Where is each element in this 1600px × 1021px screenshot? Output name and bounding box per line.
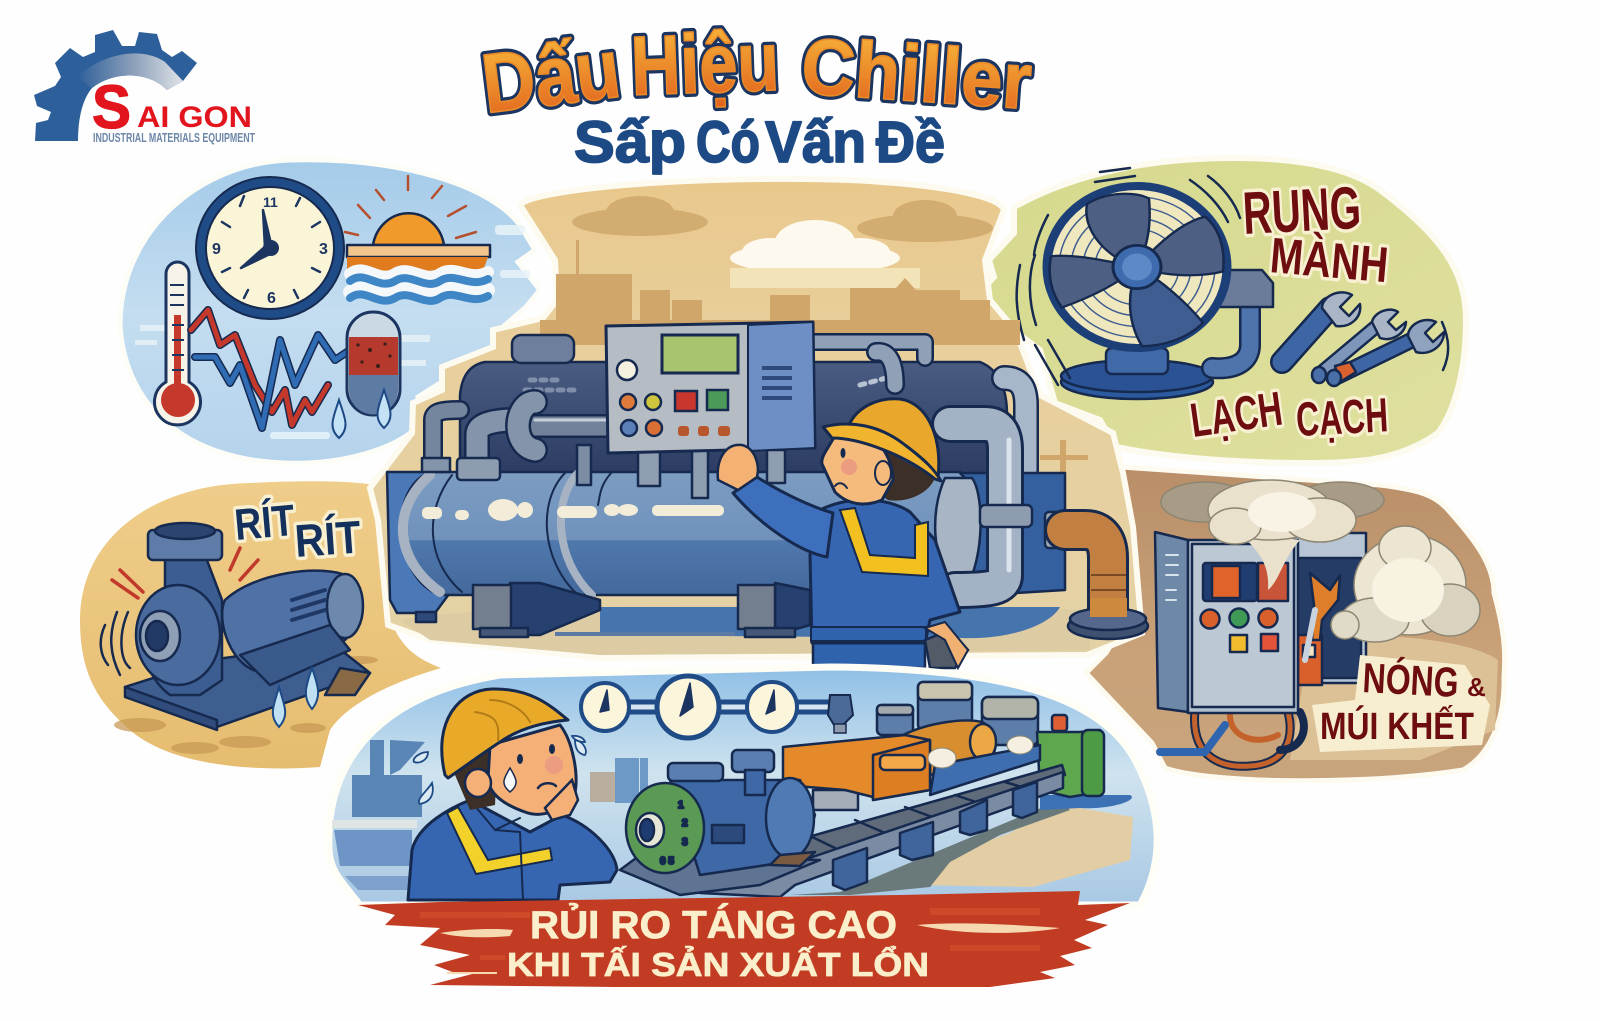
waves	[350, 270, 488, 301]
panel background	[80, 481, 441, 768]
chiller: upper tank	[460, 335, 1007, 475]
panel legs	[638, 450, 785, 498]
panel background	[973, 158, 1466, 463]
label: nóng & mùi khét: &	[1467, 672, 1486, 702]
zigzag line red outline	[191, 310, 328, 425]
propping hand	[545, 780, 578, 820]
fan motor and hose	[1212, 270, 1273, 368]
sand patch	[1290, 636, 1498, 760]
clock: 6	[267, 290, 276, 307]
zigzag line blue outline	[195, 335, 350, 428]
label: lạch cạch: CẠCH	[1295, 389, 1389, 447]
sky streaks	[135, 225, 530, 439]
vents	[762, 368, 792, 398]
gray block	[813, 790, 858, 810]
pump with green dial: 0 5	[660, 856, 674, 867]
fan base	[1061, 348, 1213, 399]
panel background	[329, 667, 1157, 905]
pump with green dial: 2	[682, 818, 688, 829]
safety collar	[840, 508, 928, 576]
water drops	[273, 668, 318, 727]
logo letter S: S	[92, 73, 131, 141]
reflective strip	[447, 807, 552, 874]
conveyor belt	[700, 745, 1065, 897]
flame and wires	[1305, 573, 1340, 660]
title	[477, 14, 1034, 175]
chiller: flanges left	[422, 445, 591, 485]
chiller: right end cap	[935, 473, 1065, 595]
label: rít rít: RÍT	[233, 495, 297, 550]
panel background	[120, 160, 540, 463]
panel background	[370, 179, 1142, 658]
cable loops	[1160, 710, 1304, 766]
sand area	[905, 807, 1133, 887]
banner streaks	[440, 923, 1060, 974]
chiller: main cylinder	[401, 472, 979, 595]
copper pipe	[1045, 512, 1148, 639]
logo tagline: INDUSTRIAL MATERIALS EQUIPMENT	[93, 131, 255, 145]
title line 1: Dấu	[477, 21, 625, 131]
chiller: elbow pipes left	[477, 402, 610, 460]
water drops	[332, 390, 391, 438]
clock: 9	[212, 241, 221, 258]
water bands	[332, 820, 417, 890]
wrenches	[1282, 292, 1444, 386]
torso	[810, 500, 960, 643]
hair	[452, 745, 498, 810]
chiller: saddles	[473, 583, 810, 637]
title line 2	[574, 110, 945, 175]
logo wordmark: AI GON	[137, 101, 252, 134]
panel: production load risk	[329, 667, 1157, 905]
title line 1: Dấu	[477, 21, 625, 131]
display	[662, 335, 738, 373]
label: nóng & mùi khét	[1312, 653, 1490, 752]
title line 1: Chiller	[799, 21, 1034, 126]
label: lạch cạch: LẠCH	[1187, 383, 1286, 448]
banner line 2: KHI TẤI SẢN XUẤT LỔN	[507, 946, 929, 983]
body	[408, 800, 617, 900]
cabinet body	[1155, 532, 1298, 713]
hard hat	[848, 399, 939, 478]
collar line	[470, 800, 523, 900]
smoke cloud right	[1331, 526, 1480, 642]
smoke puffs	[928, 736, 1033, 768]
title line 1	[477, 14, 1034, 131]
sun and horizon	[345, 176, 490, 274]
background factory left	[352, 740, 425, 817]
vibration lines	[1017, 168, 1448, 385]
pump with green dial: 3	[682, 837, 688, 848]
factory silhouette	[540, 240, 1088, 500]
label: rít rít: RÍT	[293, 510, 363, 567]
banner: risk warning	[358, 891, 1130, 987]
face	[822, 425, 893, 504]
clock: 3	[319, 241, 328, 258]
sight glass capsule	[347, 312, 400, 415]
banner line 1: RỦI RO TÁNG CAO	[530, 903, 897, 947]
face	[488, 725, 576, 814]
label: rung mạnh	[1241, 174, 1390, 293]
pump motor	[222, 571, 363, 685]
white cloud	[730, 220, 920, 288]
conveyor tanks	[877, 682, 1067, 745]
pump with green dial: 1	[678, 800, 684, 811]
title line 1: Chiller	[799, 21, 1034, 126]
waist band	[811, 627, 926, 641]
tear	[504, 768, 516, 792]
open cabinet door	[1290, 533, 1366, 685]
label: rung mạnh: RUNG	[1241, 174, 1363, 247]
ground specks	[114, 656, 378, 754]
smoke cloud top	[1161, 480, 1384, 590]
pipe flange	[980, 505, 1032, 527]
vibration marks	[112, 548, 258, 598]
thermometer	[154, 262, 200, 425]
banner ribbon	[358, 891, 1130, 987]
label: nóng & mùi khét: MÚI KHẾT	[1320, 704, 1474, 748]
orange box	[783, 735, 930, 800]
title line 1: Hiệu	[629, 14, 781, 113]
chiller: highlight band	[422, 499, 724, 521]
gauges row	[581, 676, 853, 738]
title line 2: Đề	[876, 110, 945, 175]
chiller: left end plate	[387, 472, 452, 622]
clock	[196, 177, 344, 319]
gear swoosh	[77, 53, 183, 90]
trousers	[813, 640, 925, 668]
indicator marks	[678, 426, 730, 436]
panel: seasonal hours and temperature	[120, 160, 540, 463]
background factory right	[590, 758, 648, 803]
title line 2: Sấp	[574, 110, 686, 175]
hard hat	[442, 689, 568, 778]
panel: pump noise (rít rít)	[80, 481, 441, 768]
pump volute	[136, 523, 222, 695]
fan head	[1047, 186, 1227, 348]
background clouds	[572, 196, 993, 242]
panel: central chiller scene	[370, 179, 1148, 668]
panel housing	[606, 322, 815, 453]
pump base	[125, 643, 370, 730]
pump with green dial	[620, 750, 820, 895]
vibration lines	[101, 612, 130, 675]
banner shading	[420, 908, 1040, 960]
panel: noisy fan (rung mạnh, lạch cạch)	[973, 158, 1466, 463]
panel background	[1086, 467, 1505, 781]
clock: 11	[263, 194, 278, 210]
zigzag line red	[191, 310, 328, 425]
big elbow pipe right	[950, 424, 1009, 590]
worried worker	[408, 689, 617, 900]
hand	[718, 445, 758, 490]
label: rít rít	[233, 495, 363, 567]
logo: Sai Gon Industrial Materials Equipment	[34, 30, 255, 145]
ground and shadow	[400, 606, 1090, 655]
shadow under conveyor	[790, 800, 1070, 895]
gear emblem	[34, 30, 197, 141]
worker with hard hat	[718, 399, 968, 668]
panel: overheating electrical cabinet (nóng & mùi khét)	[1086, 467, 1505, 781]
chiller: pipes upper	[433, 342, 1026, 470]
label: lạch cạch	[1187, 383, 1389, 448]
green box	[1037, 730, 1104, 797]
label: nóng & mùi khét: NÓNG	[1362, 653, 1460, 706]
title line 2: Vấn	[765, 110, 866, 175]
buttons	[617, 360, 728, 436]
title line 2: Có	[696, 110, 760, 175]
conveyor legs	[833, 782, 1037, 890]
blue pool	[1040, 795, 1132, 810]
title line 1: Hiệu	[629, 14, 781, 113]
label: rung mạnh: MÀNH	[1268, 227, 1390, 293]
orange drum	[903, 721, 996, 775]
sweat drops	[414, 736, 586, 804]
panel side	[748, 322, 815, 451]
hair	[855, 435, 935, 501]
zigzag line blue	[195, 335, 350, 428]
control panel	[606, 322, 815, 498]
glove	[925, 630, 968, 668]
raised arm	[733, 477, 833, 557]
